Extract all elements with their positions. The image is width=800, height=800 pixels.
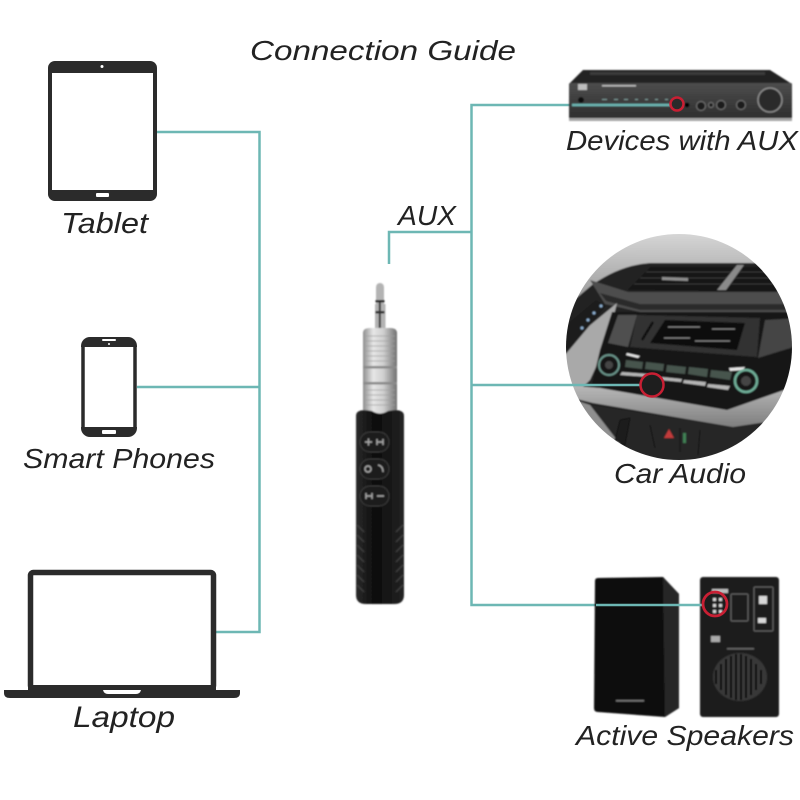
image: car audio	[566, 234, 792, 460]
image: amplifier	[569, 70, 792, 121]
label: car audio: Car Audio	[614, 458, 746, 489]
black body	[356, 410, 404, 604]
label: laptop: Laptop	[73, 701, 175, 734]
left pillar	[566, 302, 618, 388]
red AUX marker: speakers	[703, 592, 727, 616]
plug tip	[375, 283, 386, 328]
metal barrel	[363, 328, 397, 418]
right side buttons	[758, 318, 792, 358]
buttons	[625, 360, 732, 380]
connector lines: right devices	[389, 105, 596, 605]
red AUX marker: amp	[670, 98, 684, 110]
car connector line	[570, 384, 642, 386]
speaker back	[700, 577, 779, 717]
grip ridges	[357, 525, 403, 592]
red AUX marker: car	[640, 374, 664, 396]
silver keys	[620, 372, 730, 390]
lower console	[590, 405, 800, 470]
title: Connection Guide	[250, 35, 516, 66]
connector lines: left devices	[137, 132, 260, 632]
speaker front	[594, 577, 679, 717]
label: smart phones: Smart Phones	[23, 443, 215, 474]
grey band	[574, 386, 784, 428]
label: AUX: AUX	[396, 200, 457, 231]
image: active speakers	[594, 577, 779, 717]
label: tablet: Tablet	[61, 208, 150, 240]
amp tiny labels	[602, 99, 668, 100]
icon: smart phone	[81, 337, 137, 437]
base	[568, 262, 778, 437]
label: devices with AUX: Devices with AUX	[566, 125, 799, 156]
control buttons	[360, 432, 389, 506]
trim band	[590, 280, 800, 312]
knobs	[599, 355, 619, 375]
speaker connector line	[596, 604, 702, 606]
button glyphs	[365, 438, 384, 499]
radio fascia	[590, 312, 800, 412]
image: bluetooth AUX receiver	[356, 283, 404, 604]
vent	[629, 268, 777, 291]
display	[650, 320, 745, 350]
speaker grille	[713, 653, 767, 701]
upper dash	[576, 234, 756, 300]
icon: tablet	[48, 61, 157, 201]
amp connector line	[572, 104, 672, 106]
icon: laptop	[4, 572, 240, 698]
silver highlights	[626, 353, 640, 358]
label: active speakers: Active Speakers	[574, 720, 794, 751]
